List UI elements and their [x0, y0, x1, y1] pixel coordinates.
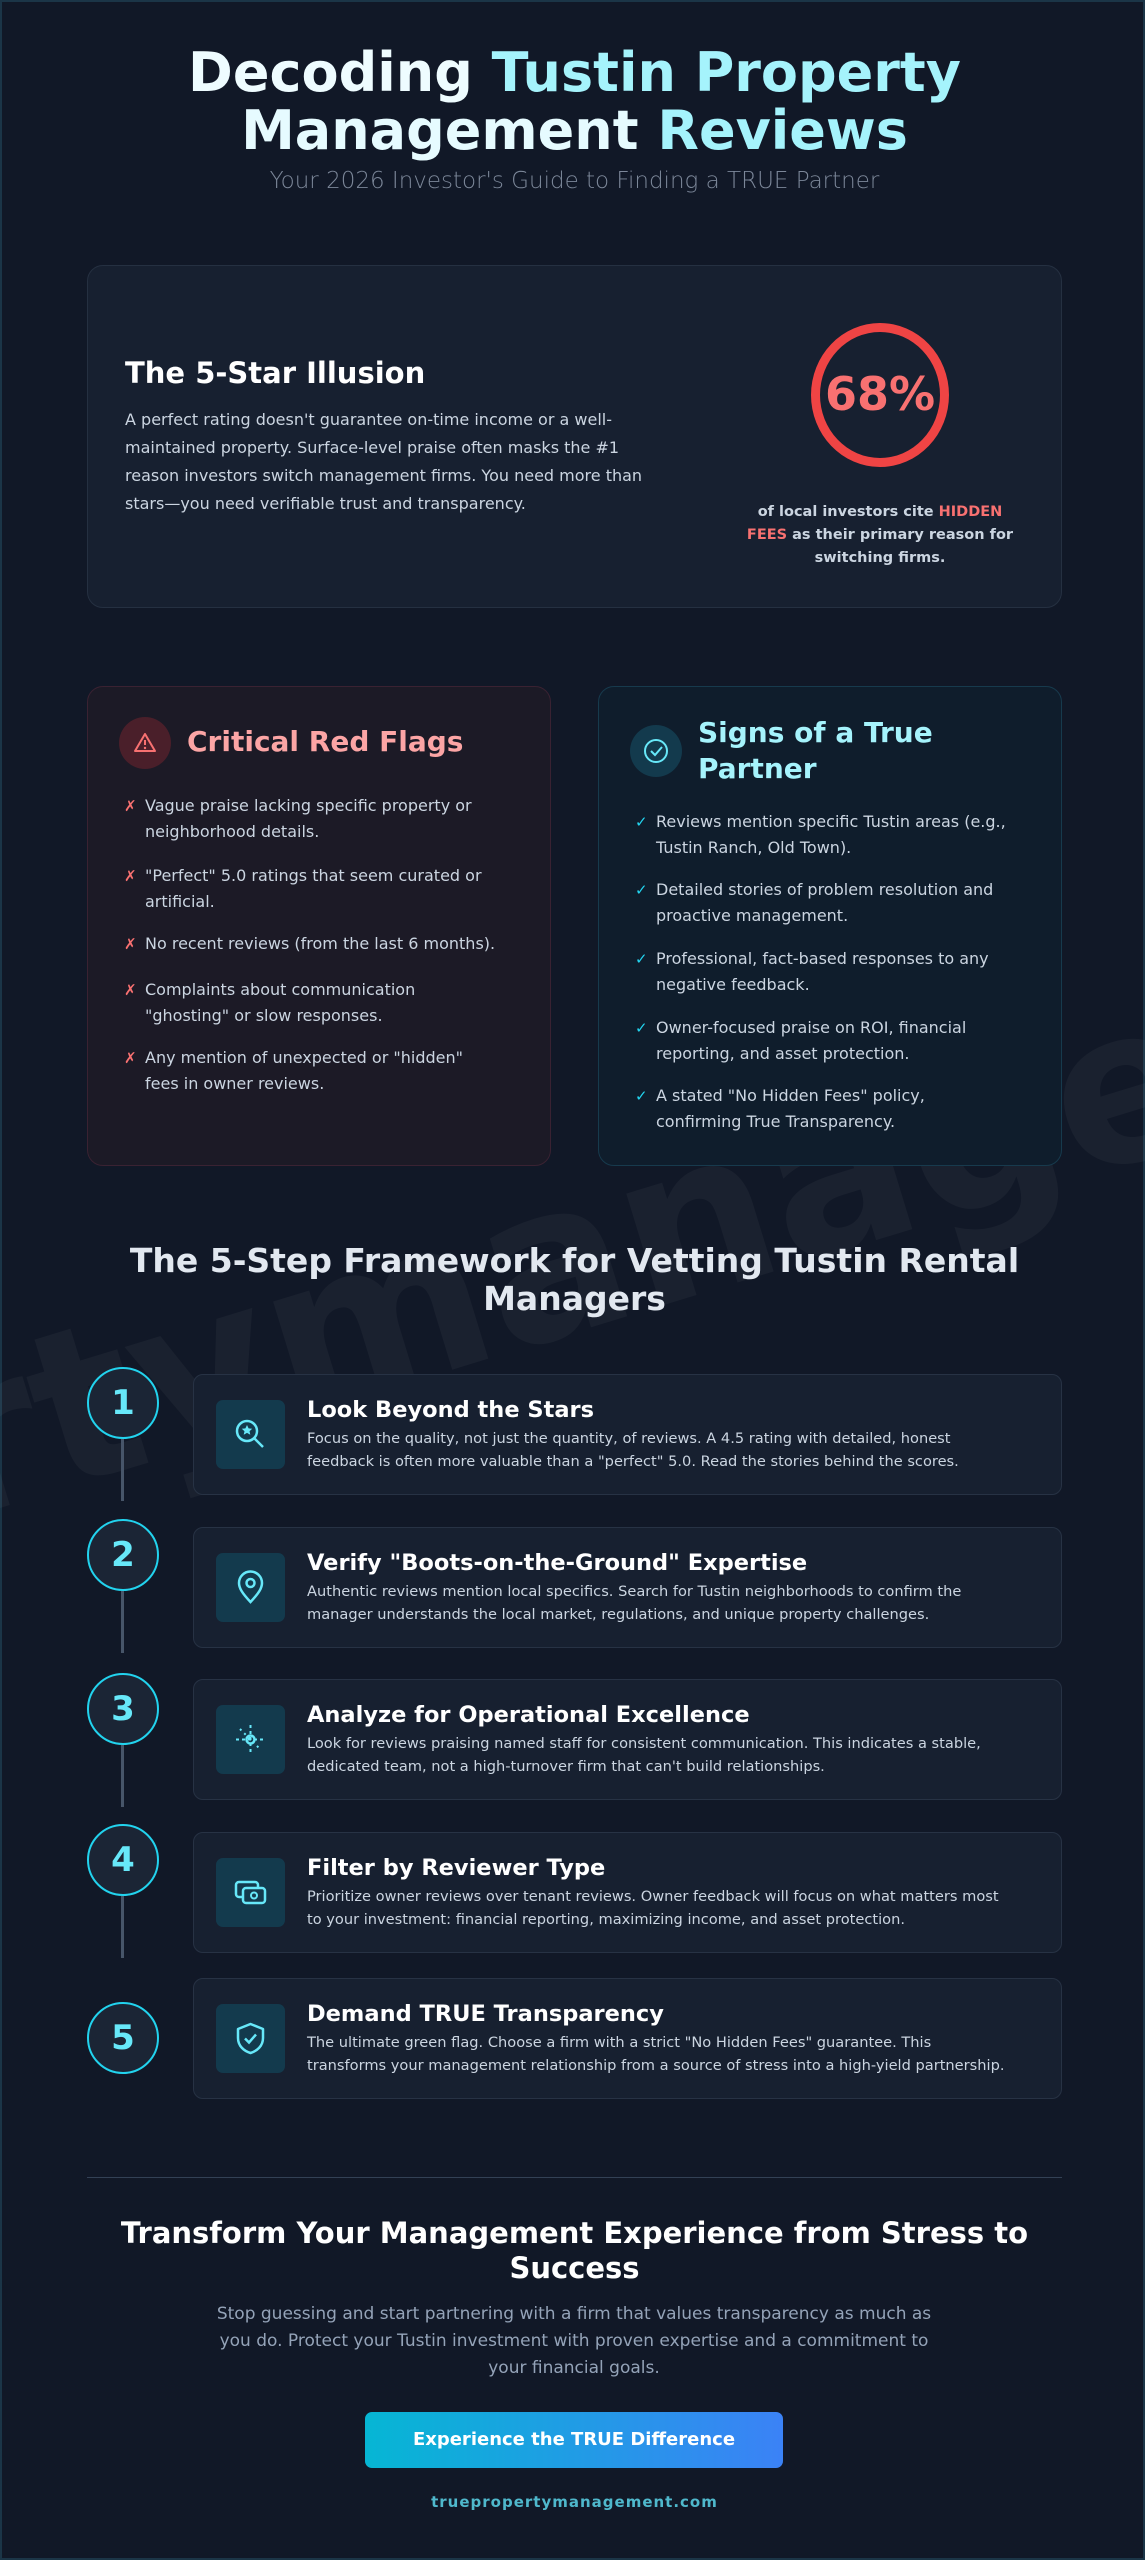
heading: 5-star illusion: The 5-Star Illusion — [125, 356, 425, 390]
heading: 5-step framework: The 5-Step Framework for Vetting Tustin Rental — [130, 1241, 1019, 1280]
step 5 card — [193, 1978, 1062, 2099]
step 4 card — [193, 1832, 1062, 1953]
panel: critical red flags: ✗ — [124, 935, 137, 953]
list: green flags: A stated "No Hidden Fees" policy, — [656, 1086, 925, 1105]
step 2 number: 2 — [111, 1535, 135, 1575]
panel: signs of a true partner — [598, 686, 1062, 1166]
step 2 card: manager understands the local market, regulations, and unique property challenges. — [307, 1606, 929, 1623]
panel: critical red flags: ✗ — [124, 981, 137, 999]
title: Management Reviews — [241, 99, 908, 162]
step 2 card — [193, 1527, 1062, 1648]
list: red flags: No recent reviews (from the last 6 months). — [145, 934, 495, 953]
list: red flags: Vague praise lacking specific property or — [145, 796, 472, 815]
list: green flags: reporting, and asset protection. — [656, 1044, 909, 1063]
heading: footer CTA: Success — [509, 2251, 640, 2285]
panel: signs of a true partner: ✓ — [635, 1087, 648, 1105]
heading: footer CTA — [121, 2216, 1028, 2285]
heading: red flags: Critical Red Flags — [187, 725, 463, 758]
step 4 number — [87, 1824, 159, 1896]
step 3 card: Look for reviews praising named staff for consistent communication. This indicates a stable, — [307, 1735, 981, 1752]
step 3 number — [87, 1673, 159, 1745]
step 5 card: Demand TRUE Transparency — [307, 2001, 664, 2027]
button: CTA — [365, 2412, 783, 2468]
panel: signs of a true partner: ✓ — [635, 881, 648, 899]
step 1 card: feedback is often more valuable than a "perfect" 5.0. Read the stories behind the scores. — [307, 1453, 959, 1470]
panel: signs of a true partner: ✓ — [635, 950, 648, 968]
panel: 5-star illusion — [87, 265, 1062, 608]
icon: check badge — [630, 725, 682, 777]
panel: critical red flags: ✗ — [124, 867, 137, 885]
heading: true partner: Signs of a True Partner — [698, 716, 933, 785]
stat: 68% ring — [811, 323, 949, 467]
step 5 card: The ultimate green flag. Choose a firm with a strict "No Hidden Fees" guarantee. This — [307, 2034, 931, 2051]
list: red flags — [124, 796, 495, 1093]
stat caption: of local investors cite HIDDEN — [758, 504, 1002, 520]
list: red flags: Complaints about communication — [145, 980, 415, 999]
list: red flags: Any mention of unexpected or "hidden" — [145, 1048, 463, 1067]
icon: warning — [119, 717, 171, 769]
list: green flags: negative feedback. — [656, 975, 810, 994]
stat: 68% ring: 68% — [825, 367, 935, 421]
panel: signs of a true partner: ✓ — [635, 1019, 648, 1037]
heading: 5-step framework — [130, 1241, 1019, 1318]
panel: critical red flags — [87, 686, 551, 1166]
button: CTA: Experience the TRUE Difference — [413, 2429, 735, 2450]
list: green flags: Detailed stories of problem resolution and — [656, 880, 993, 899]
list: green flags: Professional, fact-based responses to any — [656, 949, 989, 968]
step 5 number — [87, 2002, 159, 2074]
step 1 number: 1 — [111, 1383, 135, 1423]
panel: critical red flags: ✗ — [124, 797, 137, 815]
icon: magnifier — [216, 1400, 285, 1469]
list: green flags: confirming True Transparency. — [656, 1112, 895, 1131]
list: red flags: artificial. — [145, 892, 215, 911]
panel: signs of a true partner: ✓ — [635, 813, 648, 831]
title: Decoding Tustin Property — [188, 41, 961, 104]
step 4 number: 4 — [111, 1840, 135, 1880]
step 5 card: transforms your management relationship from a source of stress into a high-yield partnership. — [307, 2057, 1004, 2074]
step 3 card — [193, 1679, 1062, 1800]
list: red flags: "Perfect" 5.0 ratings that seem curated or — [145, 866, 482, 885]
icon: map pin — [216, 1553, 285, 1622]
list: green flags: Reviews mention specific Tustin areas (e.g., — [656, 812, 1006, 831]
list: green flags — [635, 812, 1006, 1131]
text block: illusion body: A perfect rating doesn't guarantee on-time income or a well- — [125, 410, 612, 429]
step 5 number: 5 — [111, 2018, 135, 2058]
step 1 card: Focus on the quality, not just the quantity, of reviews. A 4.5 rating with detailed, honest — [307, 1430, 950, 1447]
list: green flags: proactive management. — [656, 906, 848, 925]
list: red flags: fees in owner reviews. — [145, 1074, 324, 1093]
step 3 card: Analyze for Operational Excellence — [307, 1702, 750, 1728]
panel: critical red flags: ✗ — [124, 1049, 137, 1067]
stat caption — [747, 504, 1013, 566]
step 2 card: Verify "Boots-on-the-Ground" Expertise — [307, 1550, 807, 1576]
step 1 number — [87, 1367, 159, 1439]
url: truepropertymanagement.com — [431, 2493, 718, 2511]
text block: illusion body: reason investors switch management firms. You need more than — [125, 466, 642, 485]
stat caption: switching firms. — [815, 550, 945, 566]
title — [188, 41, 961, 162]
icon: money — [216, 1858, 285, 1927]
step 1 card — [193, 1374, 1062, 1495]
step 1 card: Look Beyond the Stars — [307, 1397, 594, 1423]
step 4 card: to your investment: financial reporting, maximizing income, and asset protection. — [307, 1911, 905, 1928]
list: red flags: neighborhood details. — [145, 822, 319, 841]
icon: operations — [216, 1705, 285, 1774]
list: green flags: Tustin Ranch, Old Town). — [656, 838, 851, 857]
heading: 5-step framework: Managers — [483, 1279, 666, 1318]
step 2 number — [87, 1519, 159, 1591]
step 3 card: dedicated team, not a high-turnover firm that can't build relationships. — [307, 1758, 825, 1775]
step 2 card: Authentic reviews mention local specifics. Search for Tustin neighborhoods to confirm the — [307, 1583, 961, 1600]
list: red flags: "ghosting" or slow responses. — [145, 1006, 383, 1025]
step 4 card: Filter by Reviewer Type — [307, 1855, 605, 1881]
text block: footer body: Stop guessing and start partnering with a firm that values transparency as much as you do. Protect your Tustin investment with proven expertise and a commitment to your financial goals. — [217, 2304, 931, 2378]
stat caption: FEES as their primary reason for — [747, 527, 1013, 543]
heading: footer CTA: Transform Your Management Experience from Stress to — [121, 2216, 1028, 2250]
text block: illusion body: maintained property. Surface-level praise often masks the #1 — [125, 438, 619, 457]
text block: illusion body: stars—you need verifiable trust and transparency. — [125, 494, 526, 513]
list: green flags: Owner-focused praise on ROI, financial — [656, 1018, 966, 1037]
step 3 number: 3 — [111, 1689, 135, 1729]
text block: illusion body — [125, 410, 642, 513]
step 4 card: Prioritize owner reviews over tenant reviews. Owner feedback will focus on what matters most — [307, 1888, 999, 1905]
icon: shield check — [216, 2004, 285, 2073]
subtitle: Your 2026 Investor's Guide to Finding a TRUE Partner — [270, 168, 879, 194]
